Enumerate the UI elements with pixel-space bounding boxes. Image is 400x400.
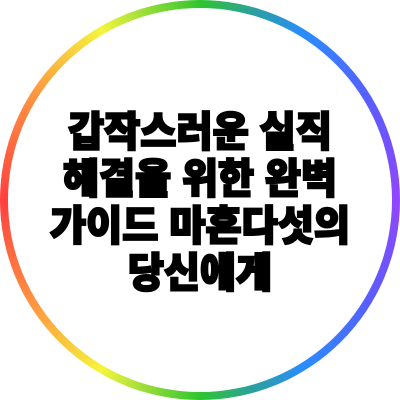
- title: 갑작스러운 실직: [68, 109, 332, 155]
- title: 당신에게: [128, 250, 272, 296]
- title: 가이드 마흔다섯의: [50, 203, 350, 249]
- title: 해결을 위한 완벽: [63, 156, 337, 202]
